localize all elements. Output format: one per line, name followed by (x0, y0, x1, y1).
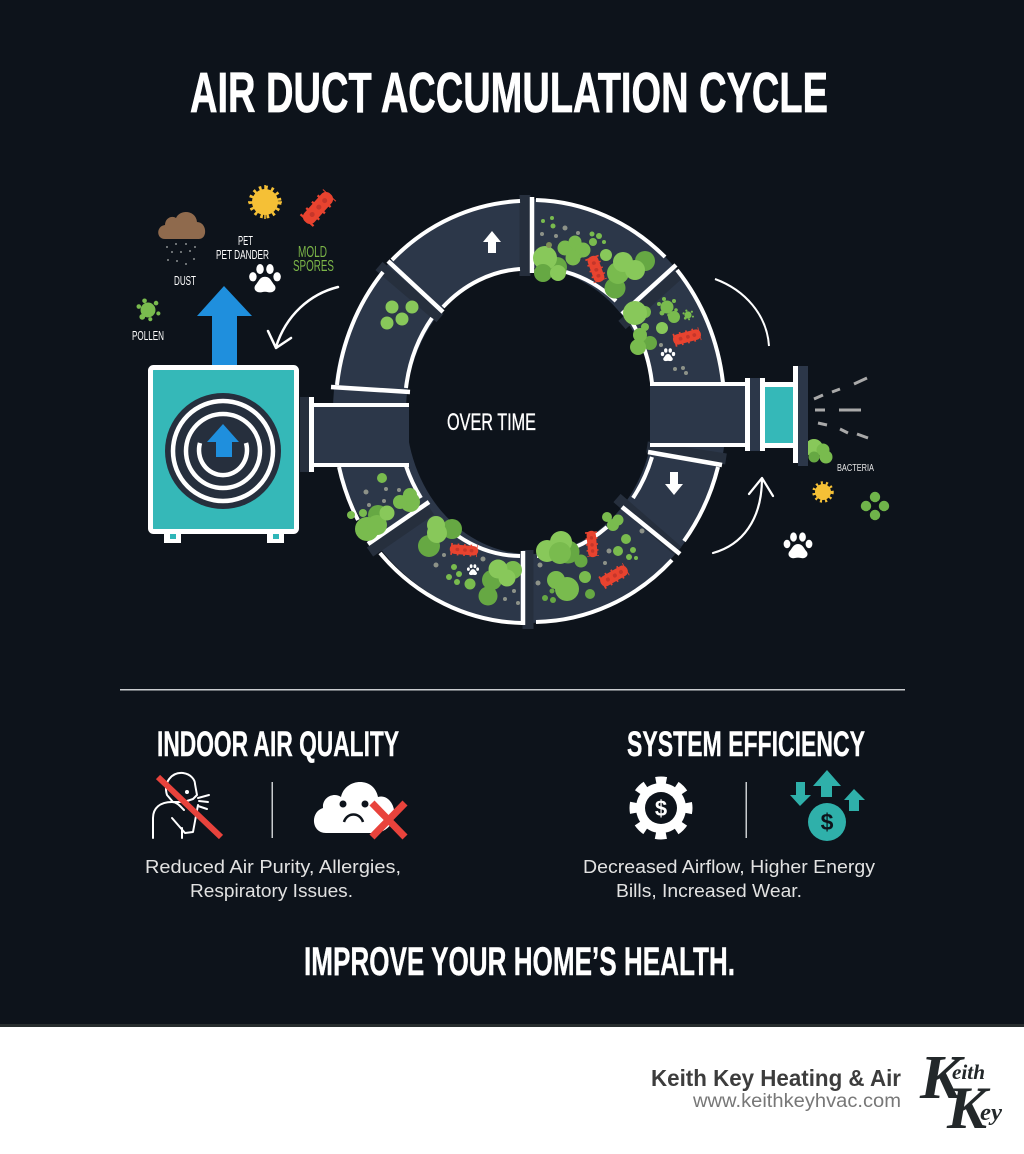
icon: gear with dollar (634, 781, 688, 835)
description: Decreased Airflow, Higher Energy (583, 856, 876, 877)
description: Bills, Increased Wear. (616, 880, 802, 901)
logo: eith (952, 1060, 985, 1084)
icon: green growth (798, 436, 832, 466)
left supply duct (300, 397, 409, 472)
HVAC unit (150, 368, 296, 543)
separator (272, 782, 273, 838)
icon: up arrow (483, 231, 501, 253)
icon: pollen (136, 298, 160, 321)
arrow: bottom right curve (713, 478, 773, 553)
contaminants: segment 4 (623, 297, 702, 375)
icon: dollar with arrows: $ (821, 809, 834, 835)
separator (746, 782, 747, 838)
right outlet duct (650, 366, 808, 463)
outlet contaminants (784, 436, 889, 558)
icon: down arrow (665, 472, 683, 495)
logo: ey (980, 1100, 1002, 1126)
icon: dust cloud (158, 212, 205, 265)
call to action: IMPROVE YOUR HOME’S HEALTH. (304, 940, 735, 984)
fan circle (165, 393, 281, 509)
label: mold spores: MOLD (298, 244, 327, 261)
description: Respiratory Issues. (190, 880, 353, 901)
icon: green clover (861, 492, 889, 520)
exhaust air dashes (814, 378, 868, 438)
website: www.keithkeyhvac.com (692, 1091, 901, 1112)
icon: dollar with arrows (790, 770, 865, 841)
description: Reduced Air Purity, Allergies, (145, 856, 401, 877)
label: pollen: POLLEN (132, 329, 164, 343)
duct ring (331, 195, 727, 629)
logo (919, 1044, 1002, 1141)
heading: INDOOR AIR QUALITY (157, 725, 399, 764)
heading: SYSTEM EFFICIENCY (627, 725, 865, 764)
footer white band (0, 1027, 1024, 1154)
footer (0, 1027, 1024, 1154)
divider (120, 689, 905, 690)
icon: small paw (784, 532, 812, 558)
airborne contaminants group (132, 185, 336, 343)
icon: sad cloud (314, 782, 405, 837)
label: over time: OVER TIME (447, 409, 536, 436)
contaminants: segment 2 (380, 300, 418, 330)
ring body (333, 199, 727, 623)
ring white outlines (331, 197, 723, 625)
contaminants: segment 6 (536, 512, 644, 603)
company name: Keith Key Heating & Air (651, 1065, 901, 1091)
unit feet (164, 532, 284, 543)
junction collars (370, 195, 726, 629)
icon: blue arrow in fan (207, 424, 239, 457)
icon: gear with dollar: $ (655, 796, 667, 821)
icon: yellow sun (248, 185, 282, 219)
icon: paw (249, 264, 281, 292)
panel: indoor air quality (145, 725, 405, 901)
unit body (150, 368, 296, 532)
label: bacteria: BACTERIA (837, 462, 874, 474)
contaminants: segment 3 (533, 216, 655, 298)
icon: coughing person (153, 773, 221, 838)
contaminants: segment 8 (347, 473, 420, 541)
logo: K (919, 1044, 965, 1112)
panel: system efficiency (583, 725, 876, 901)
label: dust: DUST (174, 274, 196, 288)
label: pet dander: PET DANDER (216, 247, 269, 262)
arrow: blue intake (197, 286, 252, 366)
logo: K (946, 1075, 991, 1141)
icon: red bacterium (300, 189, 336, 227)
label: mold spores: SPORES (293, 258, 334, 275)
arrow: top right arc (715, 279, 769, 346)
label: pet dander: PET (238, 233, 253, 248)
arrow: intake curve (268, 287, 338, 348)
contaminants: segment 7 (418, 516, 522, 606)
icon: small sun (814, 483, 832, 501)
